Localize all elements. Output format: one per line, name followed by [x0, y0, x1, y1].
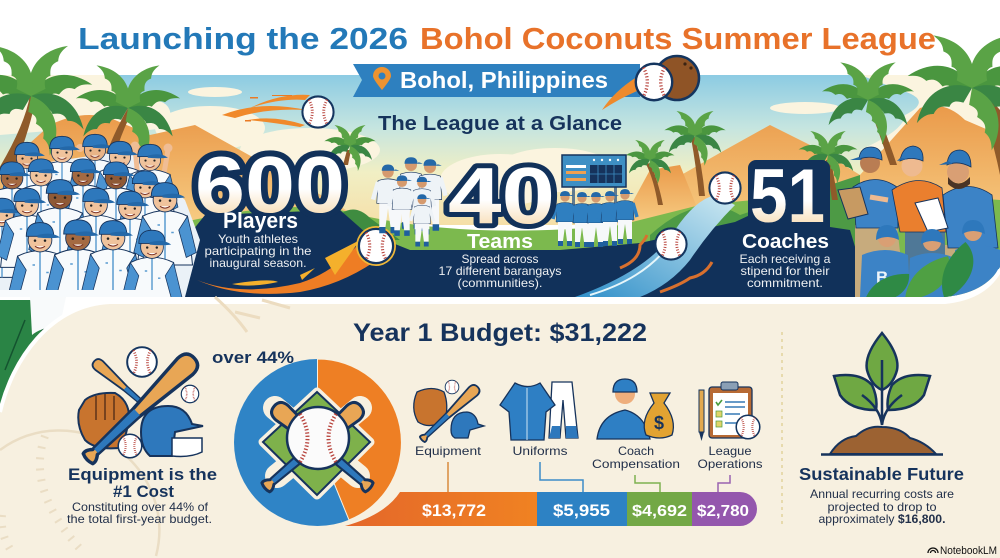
stat: 51 coaches: 51 — [750, 154, 825, 239]
stat: 40 teams: (communities). — [458, 276, 542, 290]
navy ground — [165, 210, 870, 297]
team group on grass — [373, 157, 446, 247]
icon: uniform — [500, 382, 578, 440]
stat: 600 players: Youth athletes — [218, 232, 298, 246]
callout: sustainable future: projected to drop to — [828, 500, 937, 514]
location ribbon: Bohol, Philippines — [400, 67, 608, 93]
label: league operations: Operations — [698, 457, 762, 471]
callout: equipment is the #1 cost: the total first-year budget. — [67, 512, 212, 526]
stat: 51 navy backing — [748, 160, 830, 227]
icon: map pin — [373, 67, 391, 90]
coaches group: B — [876, 268, 888, 287]
icon: bats, glove, helmet — [78, 347, 203, 468]
subheading: league at a glance: The League at a Glance — [378, 113, 622, 135]
stat: 51 coaches: stipend for their — [740, 264, 830, 278]
player legs above panel — [30, 297, 66, 335]
stat: 40 teams: 40 — [448, 151, 555, 240]
callout: sustainable future: Sustainable Future — [799, 464, 964, 484]
tropical leaves, lower right — [866, 242, 974, 297]
blue water trail with baseballs — [575, 172, 741, 297]
label: coach compensation — [592, 444, 680, 471]
title, orange part: Bohol Coconuts Summer League — [420, 21, 936, 56]
cost bar: $5,955 — [553, 501, 610, 520]
palm trees — [0, 27, 1000, 205]
stat: 51 coaches — [740, 154, 831, 290]
title: Launching the 2026 — [78, 21, 408, 56]
connector: coach compensation — [635, 475, 660, 492]
location ribbon — [353, 64, 640, 97]
grass hills — [192, 200, 1000, 297]
callout: sustainable future: approximately $16,800. — [818, 512, 946, 526]
stat: 600 players: participating in the — [204, 244, 312, 258]
jungle leaves, lower left — [0, 300, 62, 410]
stat: 51 coaches: commitment. — [747, 276, 823, 290]
crowd of players — [0, 134, 200, 309]
callout: equipment is the #1 cost — [67, 465, 217, 526]
callout: equipment is the #1 cost: Equipment is the — [68, 465, 217, 484]
stat: 40 teams: Spread across — [462, 252, 538, 266]
stat: 600 players: inaugural season. — [210, 256, 306, 270]
icon: sprout — [821, 333, 943, 454]
label: coach compensation: Coach — [618, 444, 654, 458]
comet: small baseball, upper left — [222, 95, 334, 128]
label: uniforms: Uniforms — [512, 444, 568, 458]
label: league operations: League — [708, 444, 752, 458]
stat: 600 players: 600 — [195, 140, 345, 229]
icon: coach and money bag: $ — [654, 413, 664, 433]
pie chart — [234, 359, 401, 526]
icon: baseball and coconut — [602, 56, 699, 110]
label: coach compensation: Compensation — [592, 457, 680, 471]
comet: large baseball — [197, 226, 396, 294]
stat: 51 coaches: Each receiving a — [740, 252, 831, 266]
watermark: large baseball — [0, 431, 159, 556]
callout: sustainable future — [799, 464, 964, 526]
stat: 40 teams: 17 different barangays — [438, 264, 562, 278]
team in blue under scoreboard — [553, 189, 637, 247]
callout: equipment is the #1 cost: Constituting over 44% of — [72, 500, 209, 514]
clouds — [0, 75, 1000, 206]
icon: coach and money bag — [597, 379, 673, 439]
budget heading: Year 1 Budget: $31,222 — [353, 319, 647, 347]
label: league operations — [698, 444, 762, 471]
callout: equipment is the #1 cost: #1 Cost — [113, 482, 174, 501]
callout: sustainable future: Annual recurring costs are — [810, 487, 954, 501]
stat: 40 teams: Teams — [467, 231, 533, 253]
stat: 600 players: Players — [223, 208, 298, 233]
cost bar — [345, 492, 757, 526]
icon: clipboard — [699, 382, 760, 441]
cost bar: $13,772 — [422, 501, 486, 520]
mountains — [0, 106, 1000, 230]
connector: league operations — [718, 475, 730, 492]
watermark: twig — [215, 297, 290, 332]
sky — [0, 75, 1000, 225]
cost bar: $4,692 — [632, 503, 687, 520]
cost bar: $2,780 — [697, 503, 749, 520]
pie label: over 44% — [212, 348, 294, 367]
scoreboard — [562, 155, 626, 210]
label: equipment: Equipment — [415, 444, 482, 458]
coaches group — [838, 146, 1000, 297]
connector: uniforms — [540, 462, 583, 492]
budget panel background — [0, 270, 1000, 558]
connector: equipment — [447, 462, 449, 492]
hero banner scene — [0, 27, 1000, 309]
stat: 600 players — [195, 140, 345, 270]
stat: 51 coaches: Coaches — [742, 231, 829, 253]
stat: 40 teams — [438, 151, 562, 290]
icon: equipment small — [414, 380, 484, 444]
